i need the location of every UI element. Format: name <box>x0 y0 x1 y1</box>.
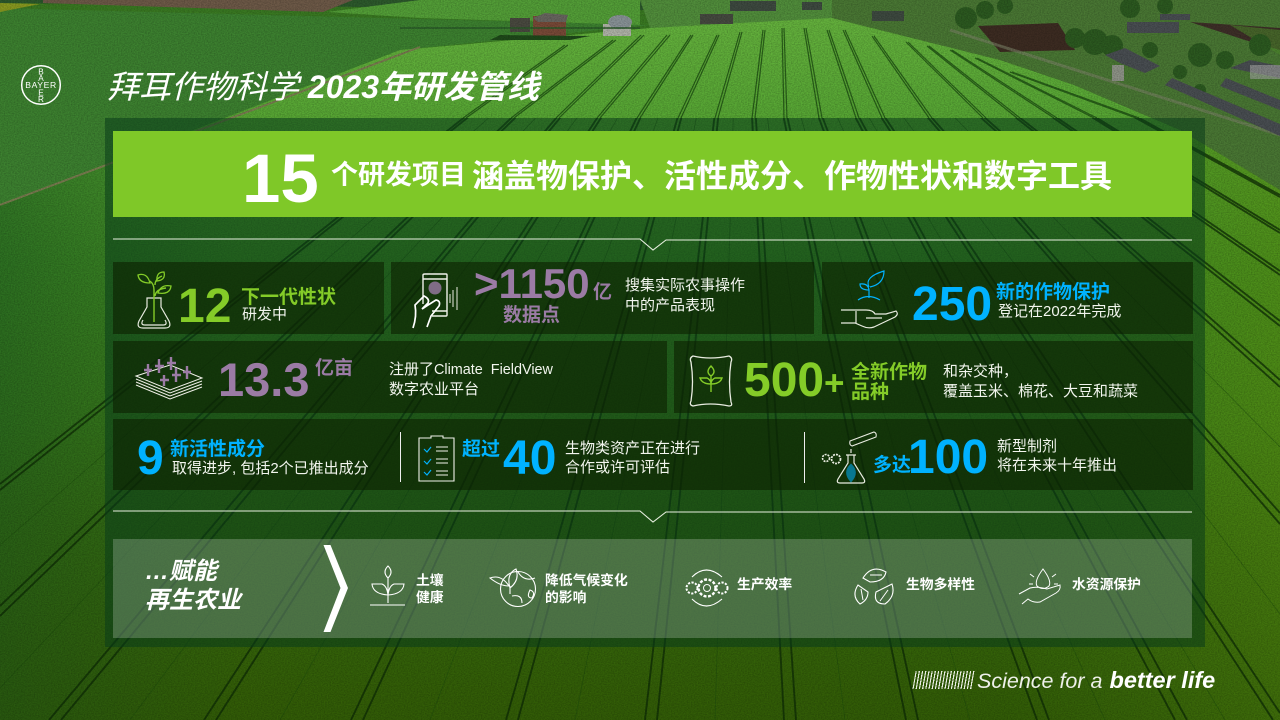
icon: gears, test tube and flask <box>822 431 877 484</box>
headline text: 个研发项目 <box>331 160 466 190</box>
panel: enabling regenerative agriculture <box>113 539 1192 638</box>
tagline text: Science for a better life <box>977 667 1215 693</box>
heading: enabling regenerative agriculture <box>145 558 244 614</box>
heading: enabling regenerative agriculture: 再生农业 <box>145 587 241 614</box>
description: 搜集实际农事操作 <box>625 277 745 294</box>
description: 和杂交种， <box>943 363 1018 380</box>
title: 拜耳作物科学 2023年研发管线 <box>107 69 539 105</box>
description <box>943 363 1138 400</box>
panel: main content backdrop <box>105 118 1205 647</box>
tagline stripes <box>912 671 976 689</box>
panel: 250 crop protection <box>822 262 1193 334</box>
description <box>997 438 1117 474</box>
unit: 亿 <box>593 282 612 303</box>
description: 生物类资产正在进行 <box>565 440 700 457</box>
icon: gears with cycle arrows <box>686 569 728 607</box>
label: data points: 数据点 <box>503 305 560 326</box>
headline banner <box>113 131 1192 217</box>
divider with notch: upper <box>113 238 1192 251</box>
label: new active ingredients: 新活性成分 <box>170 439 265 460</box>
description <box>625 277 745 314</box>
arrow: chevron <box>324 545 348 632</box>
label: water conservation: 水资源保护 <box>1072 577 1141 592</box>
label: new crop protection: 新的作物保护 <box>996 282 1110 303</box>
description: 数字农业平台 <box>389 381 479 398</box>
icon: clipboard checklist <box>418 436 455 482</box>
stat: 9: 9 <box>137 432 164 485</box>
tagline: Science for a better life <box>912 667 1215 693</box>
panel: 1.33 billion acres FieldView <box>113 341 667 413</box>
icon: hand holding phone <box>412 273 458 328</box>
icon: water drop over hand <box>1018 568 1061 604</box>
plus sign: + <box>824 364 844 403</box>
icon: biodiversity leaves <box>854 568 894 605</box>
description: 将在未来十年推出 <box>997 457 1117 474</box>
stat: 250: 250 <box>912 278 992 331</box>
sublabel: 登记在2022年完成 <box>998 303 1121 320</box>
label: new varieties: 品种 <box>851 382 889 403</box>
stat: 13.3: 13.3 <box>218 353 309 406</box>
divider <box>400 432 401 482</box>
label: climate impact: 的影响 <box>545 590 586 605</box>
label: soil health <box>416 573 444 605</box>
label: new varieties <box>851 362 927 403</box>
description: 新型制剂 <box>997 438 1057 455</box>
description <box>389 361 553 398</box>
icon: globe with leaf <box>489 568 536 607</box>
logo: Bayer cross: BAYER <box>25 80 57 90</box>
description: 合作或许可评估 <box>565 459 670 476</box>
stat: 12: 12 <box>178 280 231 333</box>
description <box>565 440 700 476</box>
stat: 500: 500 <box>744 354 824 407</box>
panel: third row of stats <box>113 419 1193 490</box>
label: next-generation traits: 下一代性状 <box>241 287 336 308</box>
headline number: 15 <box>242 140 319 217</box>
label: production efficiency: 生产效率 <box>737 577 792 592</box>
panel: 500+ new varieties <box>674 341 1193 413</box>
icon: flask with seedling <box>137 271 172 329</box>
label: climate impact: 降低气候变化 <box>545 573 628 588</box>
stat: 40: 40 <box>503 432 556 485</box>
icon: soil health <box>370 565 405 606</box>
label: new varieties: 全新作物 <box>851 362 927 383</box>
sublabel: 取得进步, 包括2个已推出成分 <box>172 460 369 477</box>
headline description: 涵盖物保护、活性成分、作物性状和数字工具 <box>472 158 1112 194</box>
logo: Bayer cross: A <box>38 74 44 83</box>
heading: enabling regenerative agriculture: …赋能 <box>145 558 217 585</box>
panel: 1150 billion data points <box>391 262 814 334</box>
icon: hand holding sprout <box>841 270 898 328</box>
icon: seed bag <box>690 355 732 407</box>
sublabel: 研发中 <box>242 306 287 323</box>
logo: Bayer cross: B <box>38 68 44 76</box>
stat: 100: 100 <box>908 431 988 484</box>
label: up to: 多达 <box>873 455 911 476</box>
label: soil health: 健康 <box>416 590 444 605</box>
icon: layered field with plants <box>134 357 204 400</box>
logo: Bayer cross <box>20 65 62 105</box>
logo: Bayer cross: E <box>38 88 44 98</box>
divider with notch: lower <box>113 510 1192 523</box>
logo: Bayer cross: R <box>38 95 44 104</box>
label: biodiversity: 生物多样性 <box>906 577 975 592</box>
unit: 亿亩 <box>315 358 353 379</box>
description: 中的产品表现 <box>625 297 715 314</box>
label: soil health: 土壤 <box>416 573 444 588</box>
stat: >1150: >1150 <box>474 260 590 307</box>
description: 覆盖玉米、棉花、大豆和蔬菜 <box>943 383 1138 400</box>
description: 注册了Climate FieldView <box>389 361 553 378</box>
panel: 12 next-generation traits <box>113 262 384 334</box>
label: climate impact <box>545 573 628 605</box>
divider <box>804 432 805 483</box>
label: over: 超过 <box>462 439 500 460</box>
